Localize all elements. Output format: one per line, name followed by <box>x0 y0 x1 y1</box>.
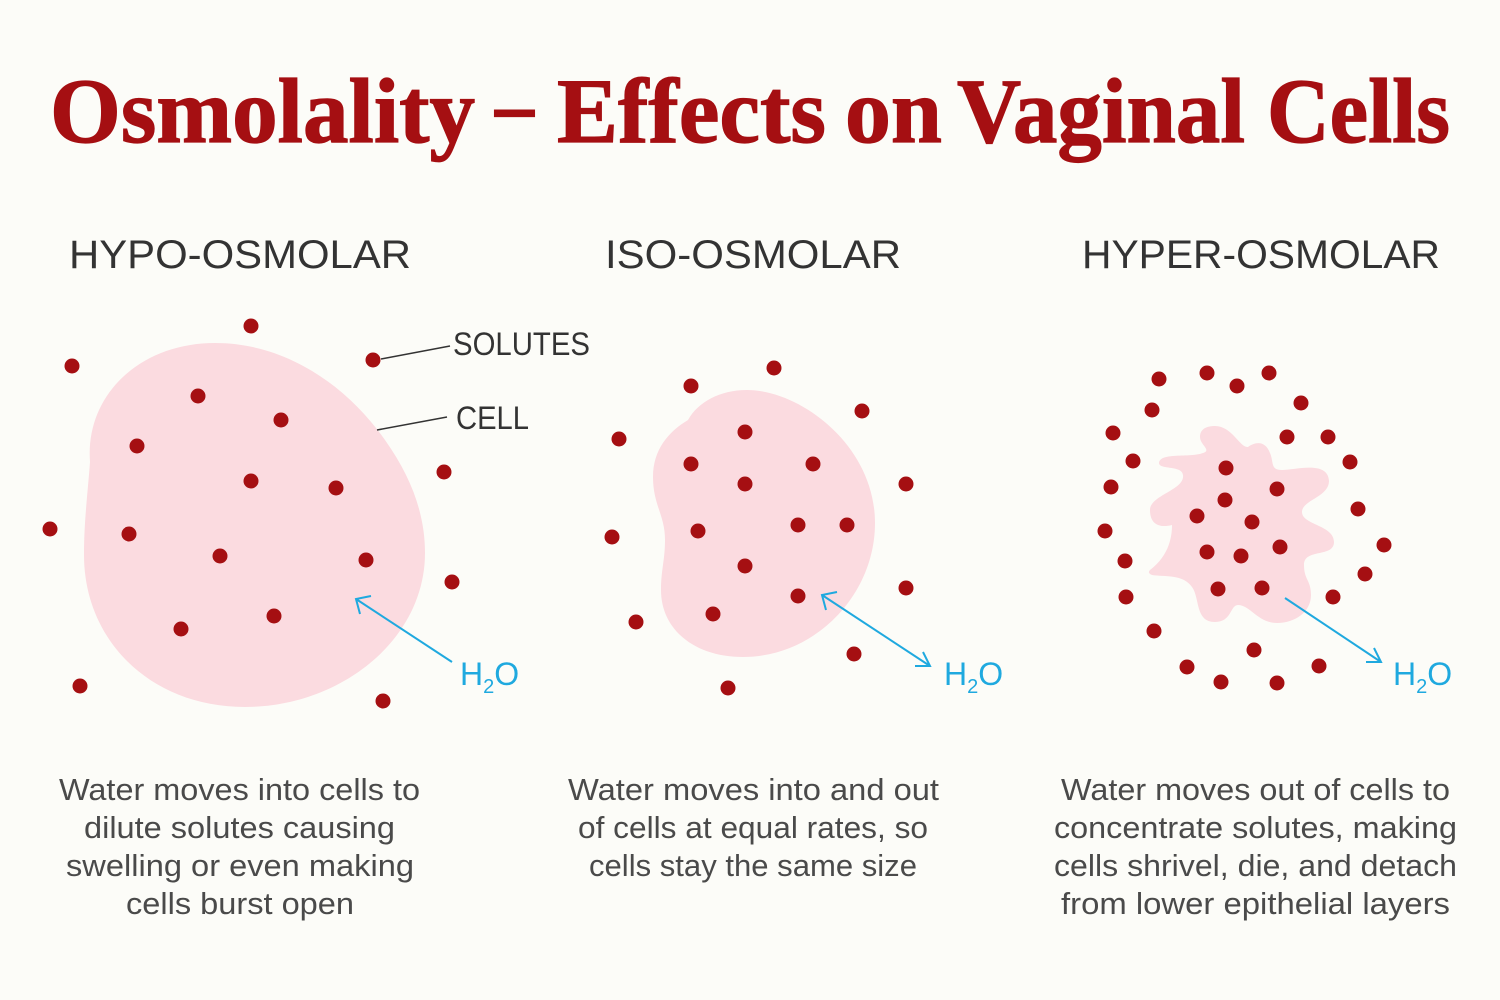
panel: hypo-osmolar diagram <box>42 318 590 708</box>
solutes label <box>381 326 590 362</box>
H2O label: 2 <box>1416 676 1427 698</box>
text block: hypo-osmolar description: swelling or even making <box>66 848 414 883</box>
H2O label: O <box>978 656 1003 692</box>
panel: hyper-osmolar diagram <box>1098 366 1452 698</box>
title: Cells <box>1267 60 1450 162</box>
cell label <box>377 400 529 436</box>
H2O label: 2 <box>483 676 494 698</box>
H2O label: H <box>1393 656 1416 692</box>
text block: hypo-osmolar description <box>59 772 420 921</box>
solutes label: SOLUTES <box>453 326 590 362</box>
text block: hyper-osmolar description <box>1054 772 1457 921</box>
shrivelled cell <box>1149 426 1334 623</box>
H2O label: O <box>1427 656 1452 692</box>
text block: iso-osmolar description: Water moves into and out <box>568 772 939 807</box>
arrow: water in and out <box>822 592 930 666</box>
solutes <box>42 318 460 708</box>
text block: iso-osmolar description: cells stay the same size <box>589 848 917 883</box>
H2O label: O <box>494 656 519 692</box>
panel: iso-osmolar diagram <box>604 360 1003 698</box>
arrow: water out of cell <box>1285 598 1381 662</box>
H2O label: 2 <box>967 676 978 698</box>
H2O label: H <box>460 656 483 692</box>
text block: hyper-osmolar description: concentrate solutes, making <box>1054 810 1457 845</box>
solutes <box>1098 366 1392 690</box>
heading: hypo-osmolar: HYPO-OSMOLAR <box>69 233 411 277</box>
arrow: water into cell <box>356 596 452 662</box>
normal cell <box>653 390 875 657</box>
text block: hypo-osmolar description: cells burst open <box>126 886 354 921</box>
text block: hypo-osmolar description: Water moves into cells to <box>59 772 420 807</box>
title: on <box>845 60 942 162</box>
text block: hyper-osmolar description: cells shrivel, die, and detach <box>1054 848 1457 883</box>
text block: iso-osmolar description: of cells at equal rates, so <box>578 810 928 845</box>
text block: hypo-osmolar description: dilute solutes causing <box>84 810 395 845</box>
cell label: CELL <box>456 400 529 436</box>
text block: hyper-osmolar description: Water moves out of cells to <box>1061 772 1450 807</box>
swollen cell <box>84 343 425 707</box>
heading: iso-osmolar: ISO-OSMOLAR <box>605 233 901 277</box>
solutes <box>604 360 914 696</box>
H2O label: H <box>944 656 967 692</box>
title: Osmolality <box>50 60 475 162</box>
text block: hyper-osmolar description: from lower epithelial layers <box>1061 886 1450 921</box>
title: – <box>494 53 535 155</box>
text block: iso-osmolar description <box>568 772 939 883</box>
title <box>50 53 1450 162</box>
heading: hyper-osmolar: HYPER-OSMOLAR <box>1082 233 1440 277</box>
title: Effects <box>557 60 826 162</box>
title: Vaginal <box>957 60 1245 162</box>
